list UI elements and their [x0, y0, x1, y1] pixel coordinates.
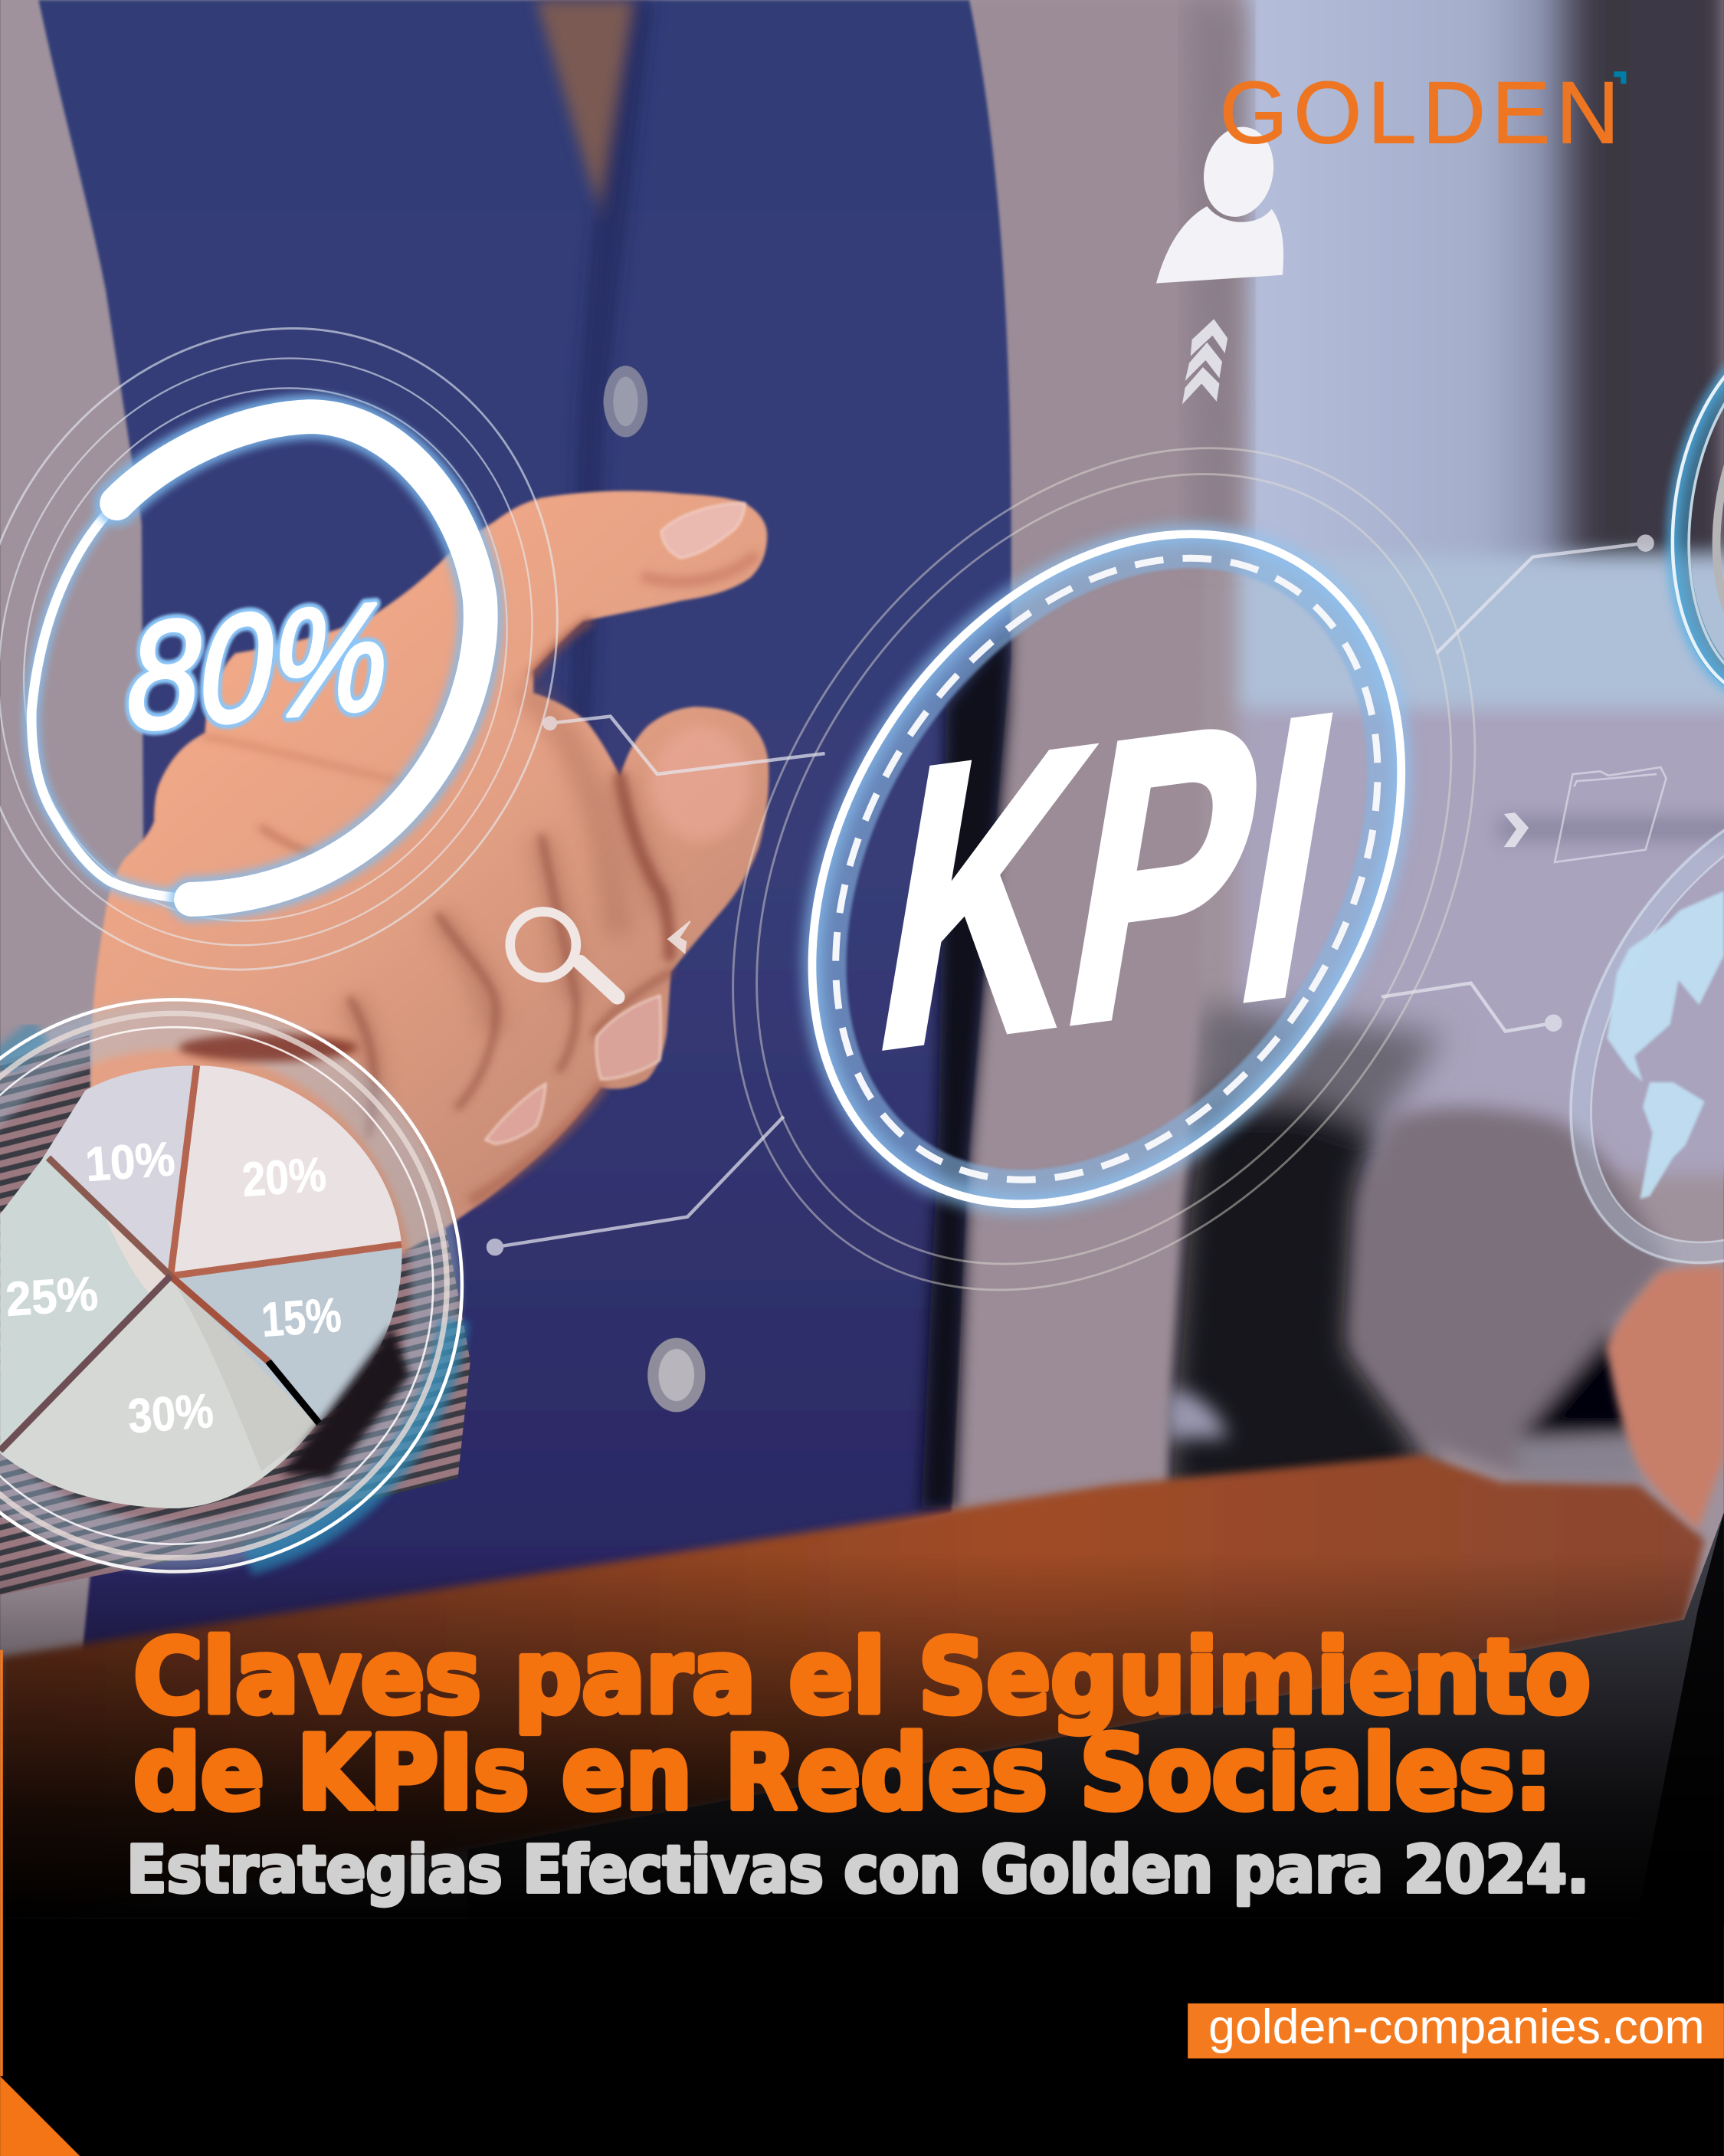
- glowing band: [713, 446, 1499, 1291]
- progress ring 80%: [0, 240, 653, 1058]
- desk surface: [0, 1455, 1705, 1925]
- pie labels: 20%: [241, 1147, 328, 1207]
- left jacket sleeve cuff: [0, 1035, 470, 1595]
- pie labels: 30%: [126, 1384, 215, 1443]
- finger creases: [205, 557, 753, 1199]
- icon: person: [1156, 120, 1283, 284]
- title: Claves para el Seguimiento: [133, 1619, 1591, 1737]
- corner triangle accent: [0, 2076, 80, 2156]
- solid black footer: [0, 1918, 1724, 2156]
- laptop: [467, 1512, 1724, 1925]
- navy shirt: [38, 0, 1011, 1692]
- KPI lettering: KPI: [853, 626, 1362, 1135]
- icon: magnifying glass: [510, 911, 618, 997]
- icon: folder: [1555, 767, 1666, 862]
- pie divider lines: [0, 1065, 402, 1451]
- title: de KPIs en Redes Sociales:: [133, 1715, 1552, 1833]
- translucent band and shadow: [0, 1025, 436, 1547]
- icon: right chevron: [1504, 812, 1529, 847]
- pie labels: 10%: [84, 1132, 176, 1192]
- icon: left chevron: [668, 921, 690, 953]
- broad finger shading: [351, 687, 667, 1114]
- pie rings: [0, 999, 462, 1572]
- outer thin rings: [580, 309, 1627, 1429]
- globe hologram: [1487, 712, 1724, 1337]
- hand pointing at the KPI display: [91, 491, 769, 1292]
- lapel: [949, 0, 1210, 1512]
- progress value: 80%: [126, 569, 389, 763]
- pie chart hologram: [0, 999, 462, 1572]
- subtitle: Estrategias Efectivas con Golden para 2024.: [126, 1833, 1589, 1908]
- solid ring: [690, 423, 1522, 1314]
- website tag: golden-companies.com: [1208, 2000, 1705, 2054]
- dashed ring: [724, 457, 1490, 1281]
- bottom black fade: [0, 1554, 1724, 1918]
- partial ring on right edge: [1650, 316, 1724, 715]
- pie slices: [0, 1065, 402, 1508]
- title: [133, 1619, 1591, 1833]
- right hand: [1607, 1266, 1724, 1529]
- pie labels: 25%: [4, 1267, 100, 1327]
- icon: upward chevrons: [1182, 319, 1227, 404]
- progress value: 80%: [126, 569, 389, 763]
- logo: GOLDEN: GOLDEN: [1219, 64, 1619, 162]
- dark shadow under pie: [282, 1327, 410, 1478]
- right sleeve and dark gap: [1162, 1004, 1444, 1498]
- icon: world map: [1607, 891, 1724, 1199]
- KPI badge: [580, 309, 1627, 1429]
- icon: shirt buttons: [604, 366, 705, 1412]
- left accent line: [0, 1650, 3, 2076]
- pie labels: 15%: [260, 1288, 343, 1347]
- pie labels: [4, 1132, 343, 1443]
- thumb pad highlight: [652, 726, 751, 842]
- icon: finger nails: [485, 503, 746, 1144]
- connector lines: [488, 537, 1653, 1254]
